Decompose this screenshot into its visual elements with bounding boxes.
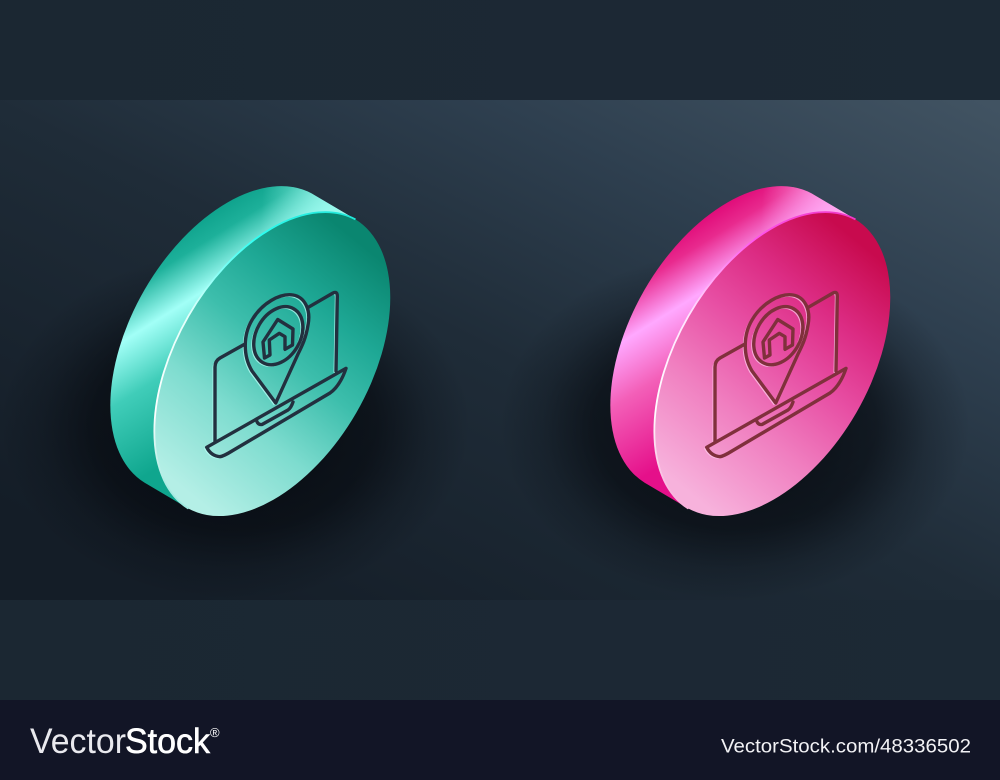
drop shadows beneath the discs (50, 289, 940, 568)
footer logo: VectorStock (30, 722, 220, 761)
icon lines (207, 292, 346, 457)
pink disc side wall (610, 186, 856, 509)
pink disc rim highlight (654, 212, 856, 509)
icon: laptop with location pin, teal (205, 292, 346, 458)
teal isometric disc (110, 186, 390, 516)
pink isometric disc (610, 186, 890, 516)
background panel (0, 100, 1000, 600)
footer logo: VectorStock: Vector (30, 722, 126, 761)
footer reference URL: VectorStock.com/48336502 (721, 736, 971, 758)
footer bar (0, 700, 1000, 780)
teal disc side wall (110, 186, 356, 509)
pink disc face (654, 212, 890, 516)
icon highlight (705, 294, 844, 458)
icon highlight (205, 294, 344, 458)
footer logo: VectorStock: Stock (125, 722, 210, 761)
footer logo: VectorStock: ® (210, 725, 220, 740)
background band: top (0, 0, 1000, 100)
icon: laptop with location pin, pink (705, 292, 846, 458)
teal disc rim highlight (154, 212, 356, 509)
background band: lower (0, 600, 1000, 700)
icon lines (707, 292, 846, 457)
teal disc face (154, 212, 390, 516)
